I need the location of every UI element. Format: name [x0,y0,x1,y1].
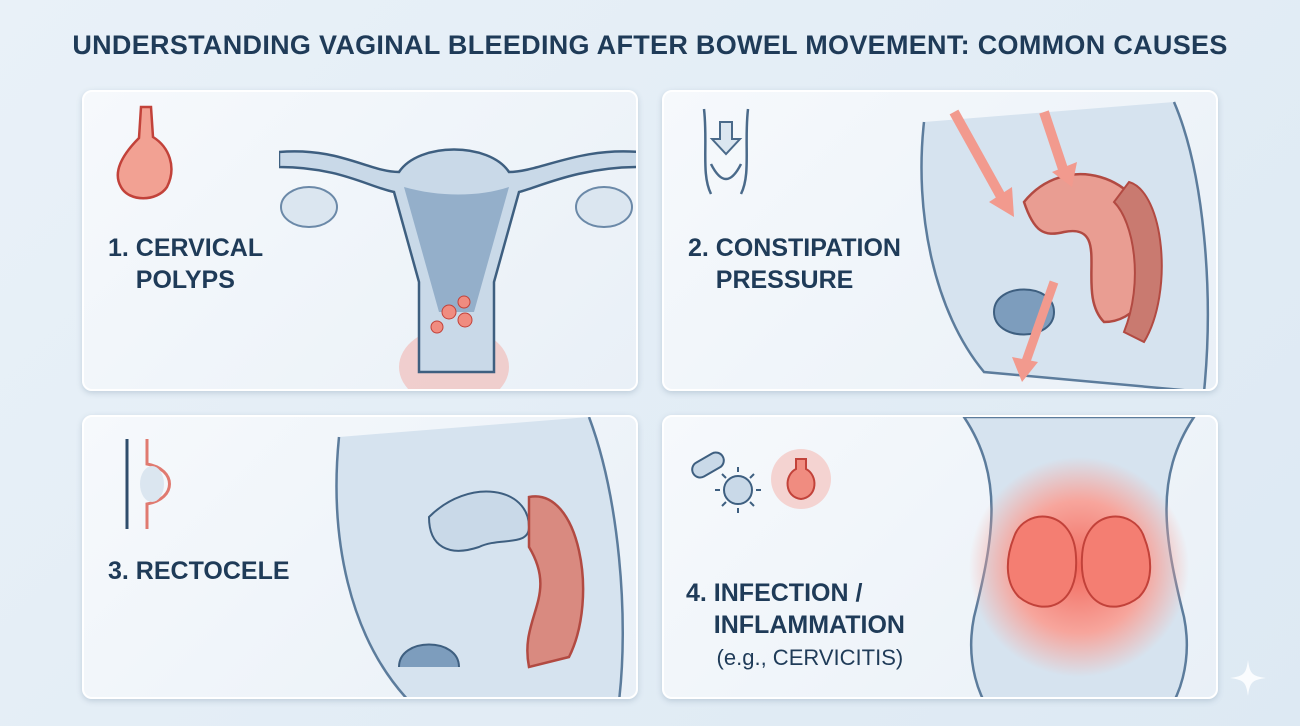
label: 4. INFECTION / [686,579,862,607]
icon: bacteria and virus [691,452,761,513]
panel: constipation pressure [662,90,1218,391]
illustration: pelvic side view [920,102,1210,389]
label [686,579,905,670]
label [108,234,263,294]
label: INFLAMMATION [714,611,905,639]
title: UNDERSTANDING VAGINAL BLEEDING AFTER BOWEL MOVEMENT: COMMON CAUSES [72,30,1228,60]
illustration: inflamed cervix [962,417,1196,697]
label: 2. CONSTIPATION [688,234,901,262]
label: POLYPS [136,266,235,294]
icon: abdomen arrow [702,108,750,194]
panel: rectocele [82,415,638,699]
label: 3. RECTOCELE [108,557,290,585]
label: PRESSURE [716,266,853,294]
label: 1. CERVICAL [108,234,263,262]
illustration: rectocele side view [335,417,624,697]
panel: infection / inflammation [662,415,1218,699]
icon: rectocele bulge [126,439,171,529]
illustration: uterus [279,148,636,389]
icon: polyp [116,106,173,200]
icon: inflamed drop [771,449,831,509]
decorative star [1231,661,1265,695]
panel: cervical polyps [82,90,638,391]
label: (e.g., CERVICITIS) [717,645,903,670]
label [688,234,901,294]
